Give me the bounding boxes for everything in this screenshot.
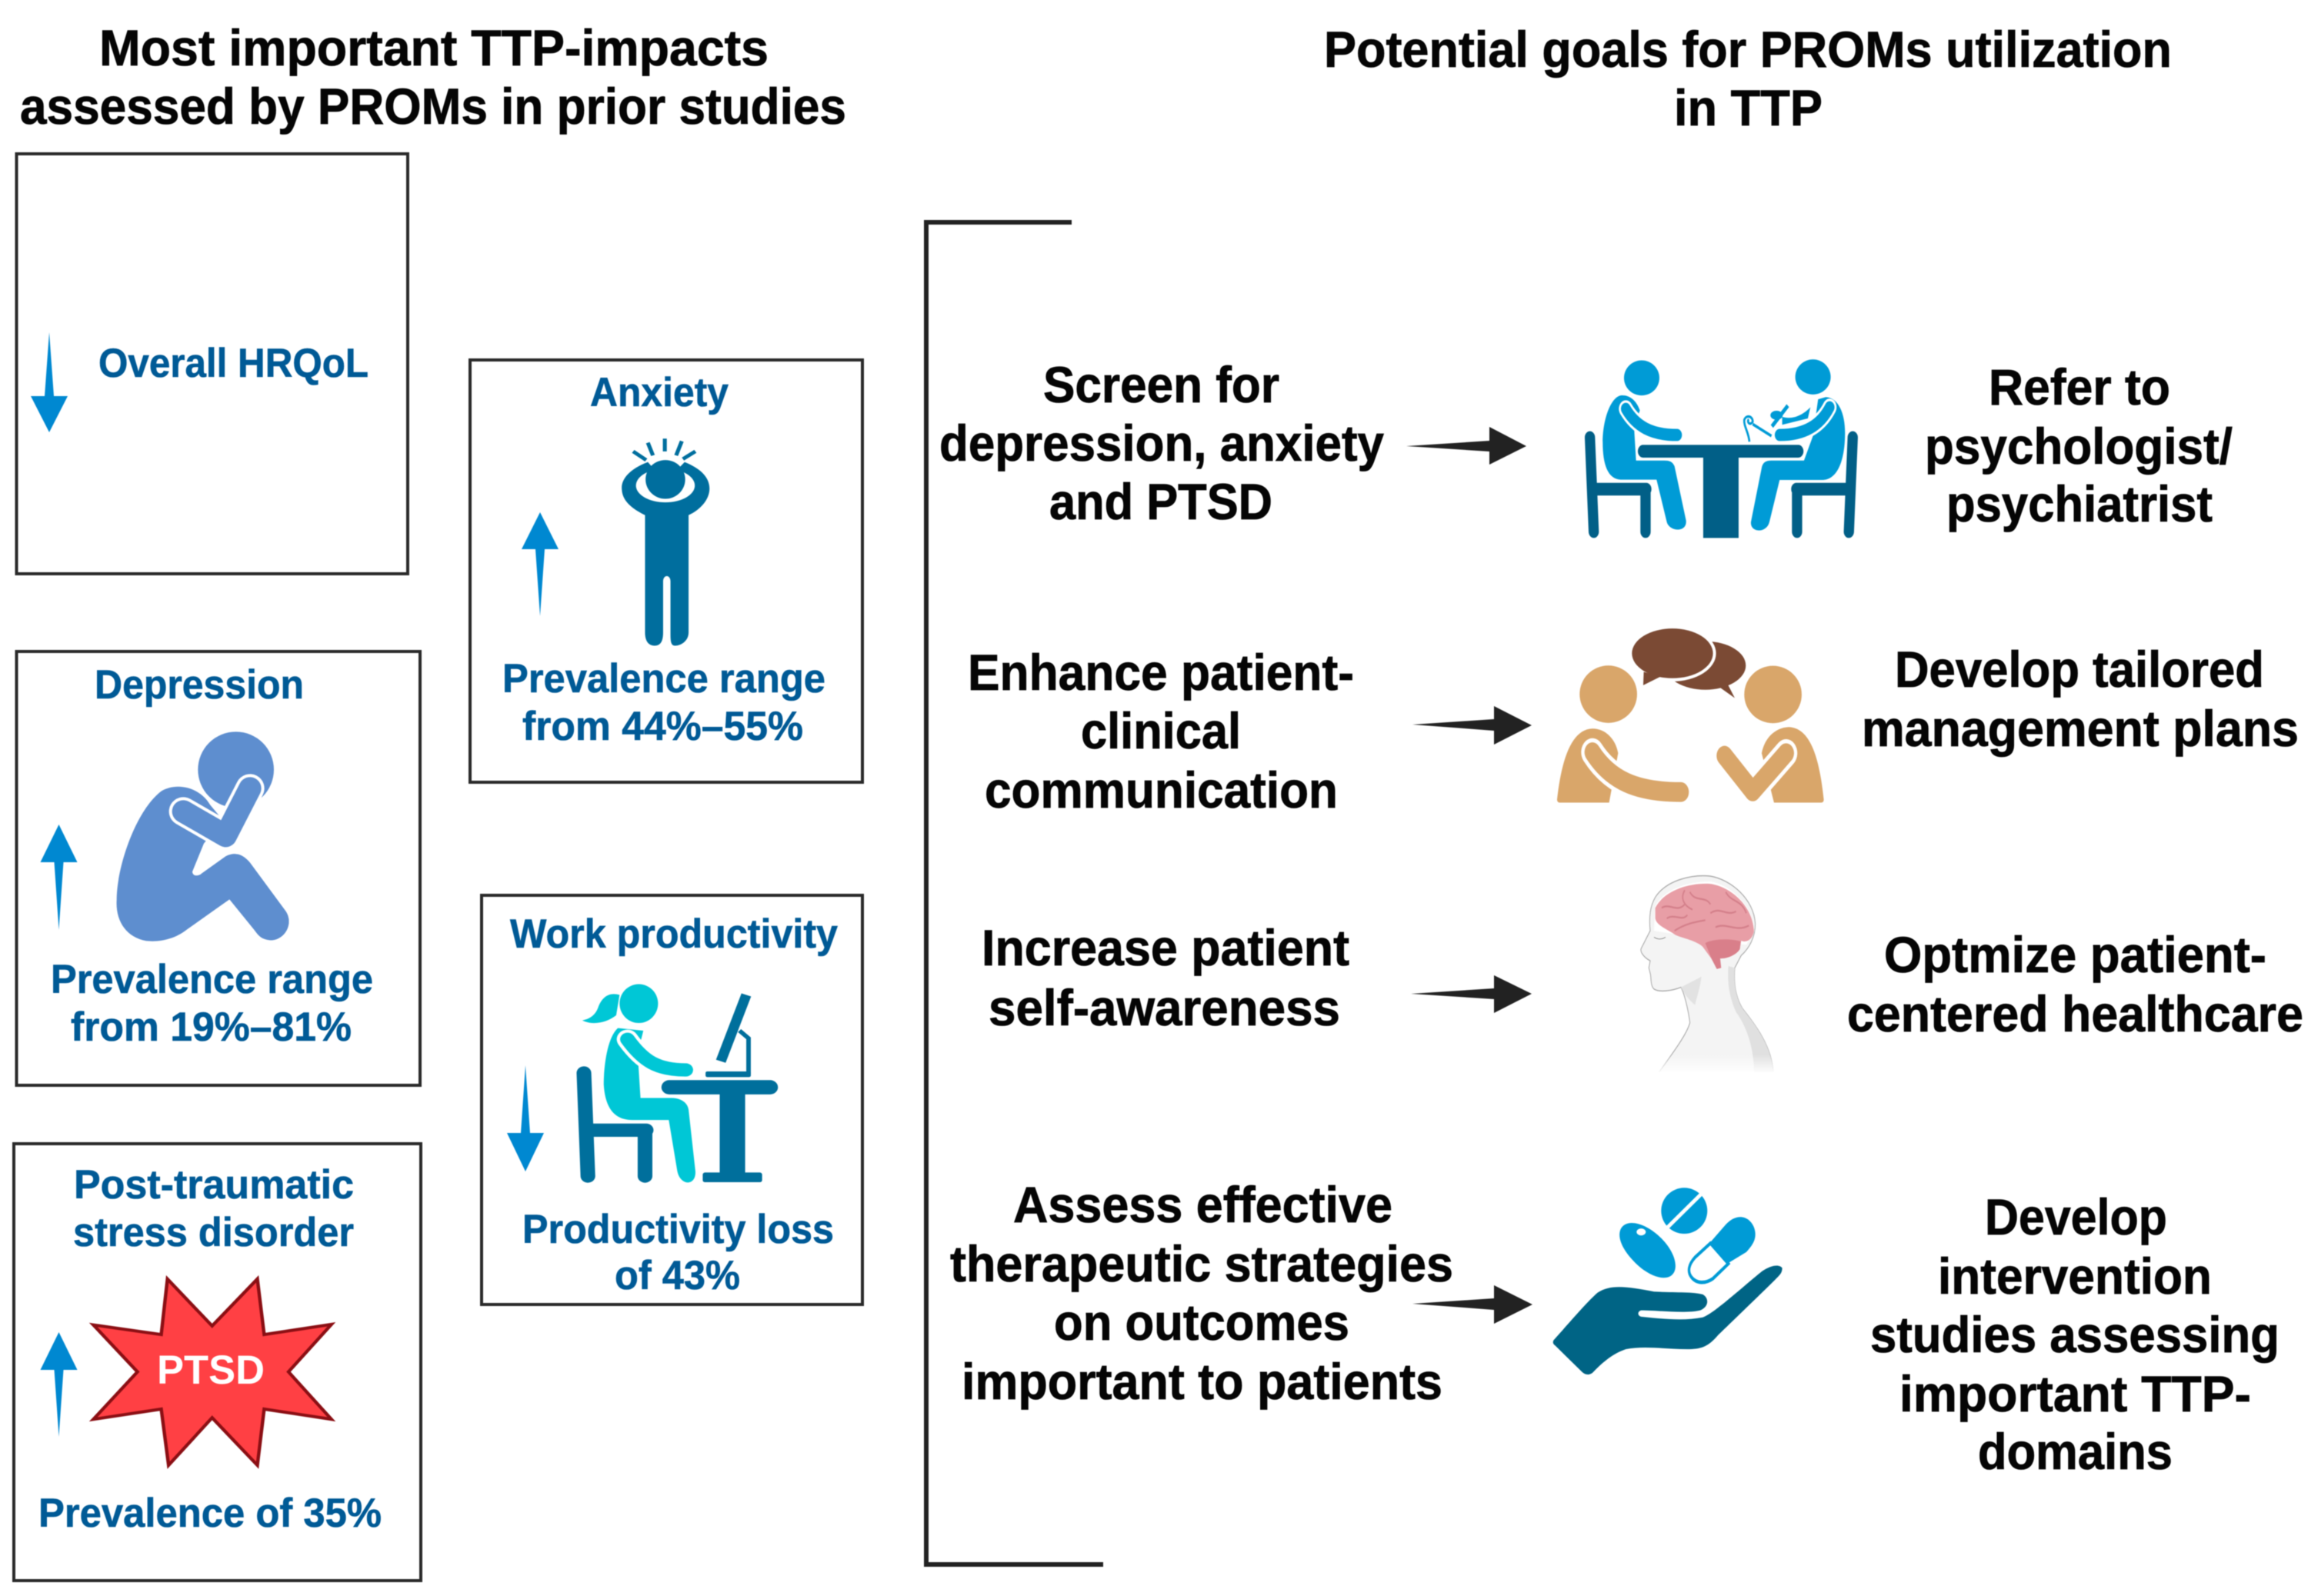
panel: PTSD xyxy=(14,1144,421,1581)
label: productivity loss: of 43% xyxy=(615,1253,740,1298)
text: develop intervention studies: important TTP- xyxy=(1899,1365,2251,1422)
panel: work productivity xyxy=(482,895,862,1304)
icon: consultation xyxy=(1590,359,1852,538)
row 2: communication text: communication xyxy=(985,761,1338,818)
text: optimize healthcare: centered healthcare xyxy=(1847,985,2303,1042)
label: depression: Depression xyxy=(95,662,304,708)
arrow: up xyxy=(40,1332,77,1437)
panel: overall HRQoL xyxy=(17,154,408,574)
row 2: communication text xyxy=(968,644,1354,818)
text: optimize healthcare xyxy=(1847,926,2303,1042)
row 1: screen text: Screen for xyxy=(1043,356,1279,413)
text: develop intervention studies: studies assessing xyxy=(1870,1306,2279,1363)
label: depression prevalence: Prevalence range xyxy=(51,957,373,1002)
icon: hand with pills xyxy=(1553,1188,1782,1374)
label: work productivity: Work productivity xyxy=(510,911,838,957)
icon: PTSD starburst: PTSD xyxy=(157,1348,265,1393)
label: anxiety prevalence xyxy=(502,656,825,749)
arrow: up xyxy=(522,512,559,616)
row 4: therapeutic strategies text: Assess effective xyxy=(1013,1176,1392,1233)
text: develop intervention studies: Develop xyxy=(1985,1188,2167,1245)
row 2: communication text: Enhance patient- xyxy=(968,644,1354,701)
text: develop intervention studies xyxy=(1870,1188,2279,1480)
row 1: screen text xyxy=(939,356,1384,530)
row 3: self-awareness text: Increase patient xyxy=(982,919,1349,976)
icon: head with brain xyxy=(1641,876,1777,1074)
text: tailored management plans: Develop tailored xyxy=(1895,641,2264,698)
label: anxiety prevalence: Prevalence range xyxy=(502,656,825,701)
heading: potential goals: Potential goals for PROMs utilization xyxy=(1324,21,2172,78)
text: tailored management plans: management plans xyxy=(1862,700,2299,757)
text: refer to psychologist: psychiatrist xyxy=(1946,475,2213,532)
icon: person at desk xyxy=(582,985,778,1182)
heading: potential goals xyxy=(1324,21,2172,136)
icon: two people talking xyxy=(1557,625,1824,802)
label: post-traumatic stress disorder xyxy=(73,1162,354,1255)
label: PTSD prevalence: Prevalence of 35% xyxy=(38,1491,382,1536)
text: refer to psychologist xyxy=(1925,358,2233,532)
heading: potential goals: in TTP xyxy=(1674,79,1822,136)
heading: most important TTP-impacts: assessed by PROMs in prior studies xyxy=(20,78,846,135)
row 1: screen text: depression, anxiety xyxy=(939,415,1384,471)
icon: anxious person xyxy=(622,438,709,645)
panel: depression xyxy=(17,651,420,1085)
label: post-traumatic stress disorder: stress disorder xyxy=(73,1210,354,1255)
arrow: up xyxy=(40,825,77,930)
text: develop intervention studies: domains xyxy=(1978,1423,2173,1480)
arrow: down xyxy=(507,1065,544,1171)
label: productivity loss xyxy=(522,1207,834,1298)
arrow: row 2 xyxy=(1412,706,1532,745)
row 3: self-awareness text xyxy=(982,919,1349,1036)
text: refer to psychologist: Refer to xyxy=(1989,358,2170,415)
row 4: therapeutic strategies text: therapeutic strategies xyxy=(950,1235,1453,1292)
label: anxiety: Anxiety xyxy=(590,370,729,415)
text: develop intervention studies: intervention xyxy=(1938,1248,2212,1304)
label: anxiety prevalence: from 44%–55% xyxy=(522,704,803,749)
icon: PTSD starburst xyxy=(93,1279,332,1465)
label: depression prevalence: from 19%–81% xyxy=(71,1005,352,1050)
row 2: communication text: clinical xyxy=(1081,702,1241,759)
arrow: row 3 xyxy=(1411,975,1532,1013)
label: depression prevalence xyxy=(51,957,373,1050)
label: productivity loss: Productivity loss xyxy=(522,1207,834,1252)
icon: depressed person xyxy=(117,731,288,941)
bracket xyxy=(926,222,1103,1564)
panel: anxiety xyxy=(470,360,862,782)
row 4: therapeutic strategies text: important to patients xyxy=(962,1353,1442,1410)
arrow: down xyxy=(31,332,68,432)
text: optimize healthcare: Optmize patient- xyxy=(1884,926,2266,983)
row 4: therapeutic strategies text: on outcomes xyxy=(1054,1294,1349,1351)
text: tailored management plans xyxy=(1862,641,2299,757)
heading: most important TTP-impacts xyxy=(20,19,846,135)
row 3: self-awareness text: self-awareness xyxy=(989,979,1340,1036)
row 1: screen text: and PTSD xyxy=(1049,473,1272,530)
text: refer to psychologist: psychologist/ xyxy=(1925,418,2233,475)
label: post-traumatic stress disorder: Post-traumatic xyxy=(74,1162,354,1208)
arrow: row 1 xyxy=(1406,427,1526,465)
label: overall HRQoL: Overall HRQoL xyxy=(98,341,368,386)
arrow: row 4 xyxy=(1412,1285,1532,1324)
heading: most important TTP-impacts: Most important TTP-impacts xyxy=(99,19,769,76)
row 4: therapeutic strategies text xyxy=(950,1176,1453,1410)
